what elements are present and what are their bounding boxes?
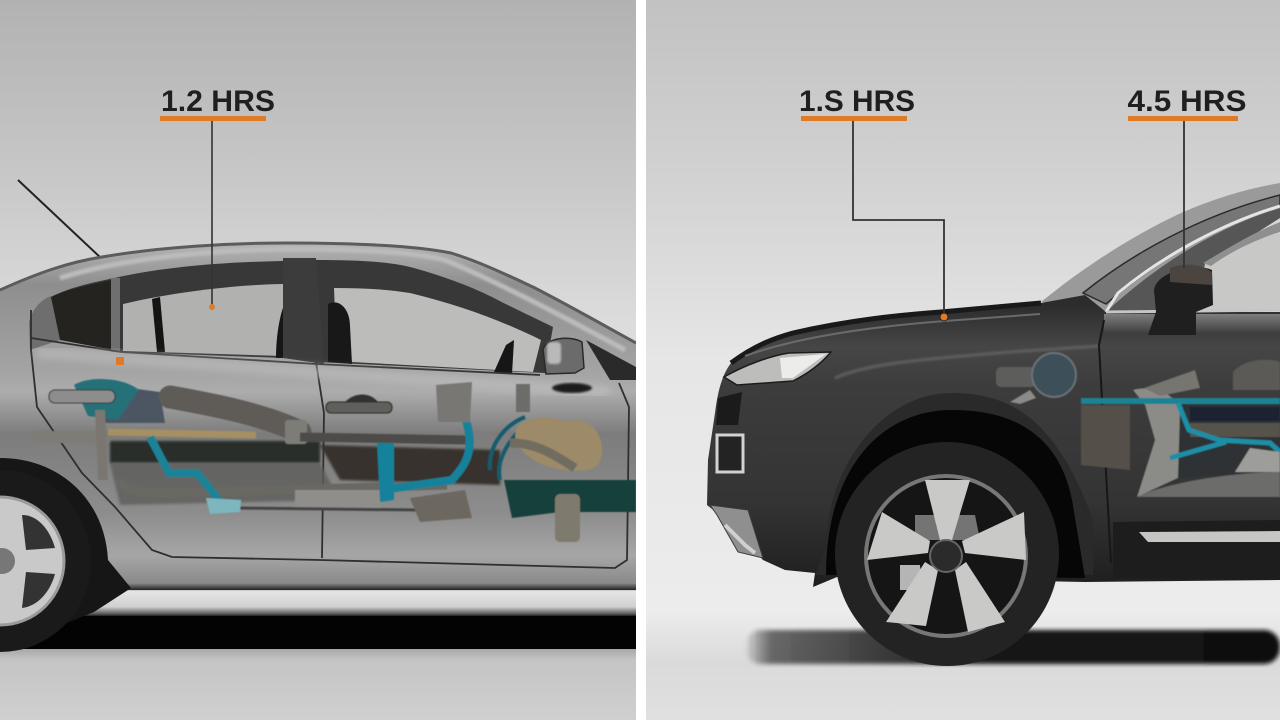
side window glass xyxy=(1195,233,1280,312)
mirror highlight xyxy=(1170,265,1212,285)
label: 1.2 HRS: 1.2 HRS xyxy=(161,85,275,118)
door seams xyxy=(31,310,629,568)
front wing dark panel xyxy=(586,340,636,380)
front rim xyxy=(866,476,1026,636)
second door handle xyxy=(326,402,392,413)
silver tray xyxy=(1137,472,1280,497)
cylinder xyxy=(1233,360,1280,390)
lower clutter xyxy=(1235,448,1280,472)
floor rail xyxy=(240,508,420,510)
navy strip xyxy=(1190,407,1280,421)
sedan body xyxy=(0,243,636,590)
belt highlight xyxy=(36,352,610,392)
dark cavity centre xyxy=(320,445,500,485)
label: 1.S HRS: 1.S HRS xyxy=(799,85,915,118)
handle cup xyxy=(345,394,378,402)
wheel arch flare xyxy=(815,393,1093,575)
white window frame xyxy=(1106,206,1280,312)
steering wheel silhouette xyxy=(494,340,514,374)
rear rim xyxy=(0,497,64,625)
window surround xyxy=(51,260,553,373)
floor shadow xyxy=(0,616,636,649)
wheel arch xyxy=(826,410,1085,578)
orange marker xyxy=(116,357,124,365)
panel: SUV cutaway xyxy=(646,0,1280,720)
chrome sill xyxy=(1139,531,1280,542)
chrome lower bumper xyxy=(710,505,763,558)
teal curves xyxy=(1170,403,1280,458)
roof highlight xyxy=(60,249,625,350)
mirror shadow xyxy=(552,383,592,393)
clutter upper 1 xyxy=(436,382,472,422)
wheel arch xyxy=(0,458,131,650)
rear tyre xyxy=(0,470,91,652)
silver tube xyxy=(295,490,381,510)
quarter window bar xyxy=(152,297,165,352)
front tyre xyxy=(835,442,1059,666)
door pillar xyxy=(283,258,324,364)
side mirror xyxy=(543,338,584,374)
tan engine xyxy=(515,418,602,471)
module bracket xyxy=(1010,390,1036,404)
A-pillar panel xyxy=(1083,195,1280,304)
grey pipe centre xyxy=(300,437,467,440)
floor shadow xyxy=(745,630,1280,664)
internal mechanics xyxy=(33,379,636,542)
rear headrest xyxy=(276,308,283,358)
label: 1.2 HRS xyxy=(160,85,275,310)
blue-grey housing xyxy=(105,385,165,423)
engine wires xyxy=(490,417,525,480)
antenna xyxy=(18,180,102,259)
caliper xyxy=(915,515,980,540)
inner window strip xyxy=(1203,222,1280,266)
divider xyxy=(636,0,646,720)
caliper lower xyxy=(900,565,922,590)
vertical bracket xyxy=(95,410,108,480)
grille upper xyxy=(716,392,742,425)
rim cutout lower xyxy=(22,572,55,608)
door seam xyxy=(1099,320,1111,563)
label: 4.5 HRS xyxy=(1128,85,1246,268)
label: 1.S HRS xyxy=(799,85,948,321)
interior cavity xyxy=(1178,398,1280,478)
bumper vent xyxy=(725,525,755,553)
teal block xyxy=(377,443,394,502)
teal line 1 xyxy=(150,437,219,500)
clutter upper 2 xyxy=(516,384,530,412)
belt line xyxy=(1106,310,1280,312)
roof edge xyxy=(0,243,636,343)
headlight glare xyxy=(780,354,826,378)
sedan rear window xyxy=(51,280,113,350)
green base xyxy=(504,480,636,518)
teal strip xyxy=(1081,398,1280,404)
floor reflection xyxy=(84,590,636,616)
rear pillar strip xyxy=(111,278,120,352)
floor below shadow xyxy=(0,649,636,720)
dark lower band xyxy=(1081,405,1130,470)
clamp xyxy=(285,420,307,444)
bottle xyxy=(555,494,580,542)
dark cavity band xyxy=(110,441,320,463)
tan pipe xyxy=(108,432,256,435)
sedan front glass xyxy=(334,288,541,372)
grille lower xyxy=(717,435,743,472)
engine band xyxy=(510,443,575,468)
door top band xyxy=(1104,314,1280,334)
muffler xyxy=(170,397,300,432)
front seat xyxy=(328,302,352,364)
lower cavity shade xyxy=(110,463,340,505)
lower pipe xyxy=(322,482,448,491)
windshield outer band xyxy=(1041,183,1280,312)
rear pillar panel xyxy=(29,296,60,350)
sedan quarter glass xyxy=(123,284,283,356)
rim hub xyxy=(0,548,15,574)
panel: sedan cutaway xyxy=(0,0,636,720)
inner window frame xyxy=(1106,208,1280,312)
rear door handle xyxy=(49,390,115,403)
fender crease xyxy=(835,346,1100,378)
module body xyxy=(996,367,1036,387)
teal line 2 xyxy=(388,412,470,489)
silver structure xyxy=(1133,388,1180,497)
teal foot xyxy=(206,498,241,514)
spokes xyxy=(867,480,1026,632)
mirror xyxy=(1148,267,1213,335)
grey pipe left xyxy=(33,431,111,443)
hood highlight xyxy=(745,314,1040,356)
module gear xyxy=(1032,353,1076,397)
internal mechanics xyxy=(996,353,1280,497)
top clutter xyxy=(1144,370,1200,396)
headlight xyxy=(724,352,831,385)
rim cutout upper xyxy=(22,515,55,550)
label: 4.5 HRS: 4.5 HRS xyxy=(1128,85,1246,118)
hub xyxy=(930,540,962,572)
SUV body xyxy=(707,295,1280,587)
grey strip xyxy=(1190,423,1280,437)
hood crease xyxy=(731,303,1041,363)
mirror highlight xyxy=(547,342,561,364)
clutter lower xyxy=(410,490,472,522)
teal handle part xyxy=(74,379,139,420)
lower door xyxy=(1113,520,1280,580)
